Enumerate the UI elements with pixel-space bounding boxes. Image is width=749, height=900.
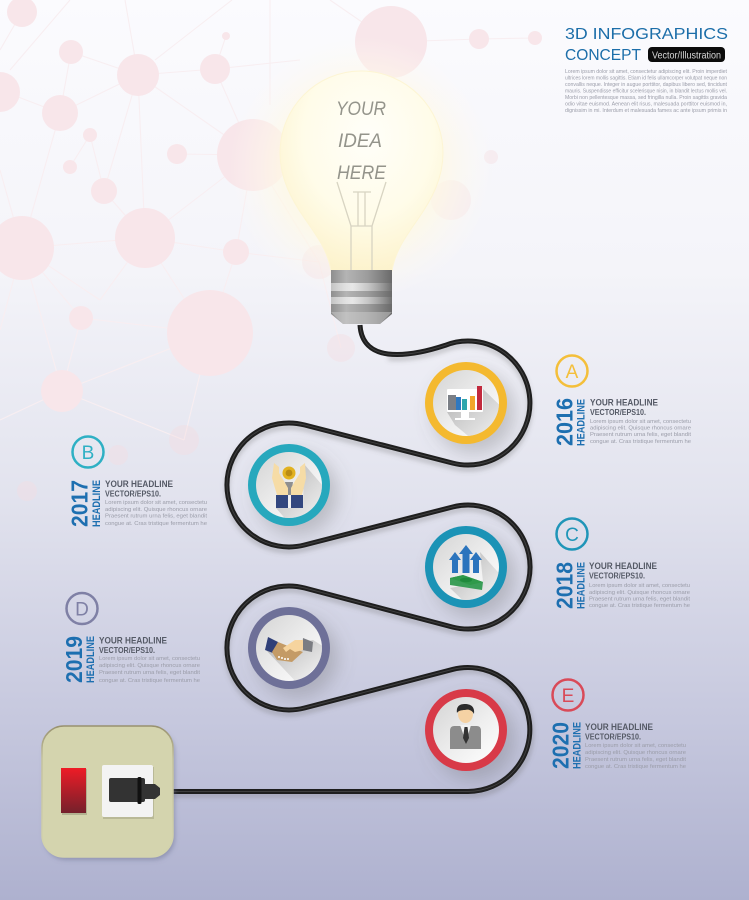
bulb text: HERE: [337, 163, 386, 184]
body text: Lorem ipsum dolor sit amet, consectetu: [585, 743, 686, 749]
body text: [105, 500, 208, 527]
icon: businessman: [450, 704, 481, 749]
step D circle: [248, 607, 338, 698]
body text: adipiscing elit. Quisque rhoncus ornare: [590, 426, 691, 432]
bulb text: IDEA: [338, 131, 382, 152]
long shadow: [266, 640, 322, 680]
title: 3D INFOGRAPHICS: [565, 26, 728, 43]
vertical headline: HEADLINE: [576, 399, 588, 446]
body text: adipiscing elit. Quisque rhoncus ornare: [105, 507, 207, 513]
body text: Praesent rutrum urna felis, eget blandit: [589, 596, 691, 602]
body text: congue at. Cras tristique fermentum he: [589, 603, 690, 609]
body text: [590, 419, 692, 445]
callout B: [66, 436, 208, 527]
body text: [99, 656, 201, 684]
body text: Praesent rutrum urna felis, eget blandit: [105, 514, 208, 520]
subheading: VECTOR/EPS10.: [589, 572, 645, 580]
year 2017: 2017: [66, 480, 92, 527]
body text: adipiscing elit. Quisque rhoncus ornare: [99, 663, 200, 669]
step B circle: [248, 444, 338, 535]
socket plate: [42, 726, 173, 857]
body text: congue at. Cras tristique fermentum he: [105, 521, 207, 527]
vertical headline: HEADLINE: [572, 722, 584, 769]
molecular network background: [0, 0, 542, 501]
heading: YOUR HEADLINE: [105, 479, 173, 489]
step A circle: [425, 362, 515, 453]
bulb glass: [280, 71, 443, 271]
title block: [565, 26, 728, 114]
metal base: [331, 270, 392, 324]
bulb text: YOUR: [336, 99, 386, 120]
badge A: A: [566, 362, 579, 383]
title line two: CONCEPT: [565, 47, 641, 64]
step C circle: [425, 526, 515, 617]
subheading: VECTOR/EPS10.: [585, 732, 641, 742]
socket shadow: [44, 730, 175, 860]
intro paragraph: convallis neque. Integer in augue porttitor, dapibus libero sed, tincidunt: [565, 82, 727, 88]
body text: Lorem ipsum dolor sit amet, consectetu: [105, 500, 207, 506]
long shadow: [450, 552, 498, 600]
icon: handshake: [265, 637, 313, 662]
intro paragraph: Morbi non pellentesque massa, sed fringilla nulla. Proin sagittis gravida: [565, 95, 727, 101]
vertical headline: HEADLINE: [576, 562, 588, 609]
body text: Praesent rutrum urna felis, eget blandit: [590, 432, 692, 438]
badge E: E: [562, 686, 574, 707]
bulb text: [336, 99, 386, 184]
icon: arrows and money: [449, 545, 483, 590]
intro paragraph: dignissim in mi. Interdum et malesuada fames ac ante ipsum primis in: [565, 108, 727, 114]
callout D: [61, 593, 201, 684]
wall socket: [42, 726, 175, 860]
badge B: [72, 436, 104, 468]
intro paragraph: odio vitae euismod. Aenean elit risus, malesuada porttitor euismod in,: [565, 102, 727, 108]
body text: [585, 743, 687, 770]
badge A: [556, 356, 588, 386]
icon: hands holding coin: [272, 463, 306, 508]
callout E: [548, 680, 687, 770]
filament: [337, 182, 386, 270]
heading: YOUR HEADLINE: [585, 722, 653, 732]
badge C: C: [565, 525, 579, 546]
body text: congue at. Cras tristique fermentum he: [585, 764, 686, 770]
white outlet: [102, 765, 154, 819]
icon: monitor chart: [447, 386, 483, 420]
intro paragraph: mauris. Suspendisse efficitur scelerisque nisin, in blandit lectus mollis vel.: [565, 88, 727, 94]
power cable: [158, 325, 530, 792]
body text: Lorem ipsum dolor sit amet, consectetu: [590, 419, 691, 425]
red switch: [61, 768, 87, 815]
intro paragraph: ultrices lorem mollis sagittis. Etiam id felis ullamcorper volutpat neque non: [565, 76, 727, 82]
body text: [589, 583, 691, 609]
long shadow: [447, 389, 499, 436]
heading: YOUR HEADLINE: [589, 561, 657, 571]
year 2019: 2019: [61, 636, 87, 683]
body text: Lorem ipsum dolor sit amet, consectetu: [99, 656, 200, 662]
body text: congue at. Cras tristique fermentum he: [99, 678, 200, 684]
heading: YOUR HEADLINE: [590, 398, 658, 408]
year 2016: 2016: [552, 398, 578, 446]
vector illustration tag: Vector/Illustration: [652, 50, 721, 62]
cable shadow: [158, 345, 532, 795]
badge D: D: [75, 600, 89, 620]
body text: adipiscing elit. Quisque rhoncus ornare: [585, 750, 686, 756]
bulb glow: [229, 36, 493, 300]
year 2020: 2020: [548, 722, 574, 769]
heading: YOUR HEADLINE: [99, 636, 167, 646]
intro paragraph: Lorem ipsum dolor sit amet, consectetur adipiscing elit. Proin imperdiet: [565, 69, 727, 75]
year 2018: 2018: [552, 562, 578, 609]
subheading: VECTOR/EPS10.: [99, 646, 155, 655]
callout A: [552, 356, 692, 446]
long shadow: [276, 466, 322, 518]
light bulb: [280, 71, 443, 324]
vertical headline: HEADLINE: [85, 636, 97, 683]
plug: [109, 777, 160, 804]
subheading: VECTOR/EPS10.: [105, 490, 161, 498]
body text: congue at. Cras tristique fermentum he: [590, 439, 691, 445]
vertical headline: HEADLINE: [91, 480, 103, 527]
intro paragraph: [565, 69, 727, 114]
badge B: B: [82, 443, 94, 464]
subheading: VECTOR/EPS10.: [590, 408, 646, 417]
body text: Praesent rutrum urna felis, eget blandit: [99, 670, 201, 676]
callout C: [552, 518, 691, 609]
body text: Praesent rutrum urna felis, eget blandit: [585, 757, 687, 763]
body text: Lorem ipsum dolor sit amet, consectetu: [589, 583, 690, 589]
step E circle: [425, 689, 515, 780]
body text: adipiscing elit. Quisque rhoncus ornare: [589, 590, 690, 596]
